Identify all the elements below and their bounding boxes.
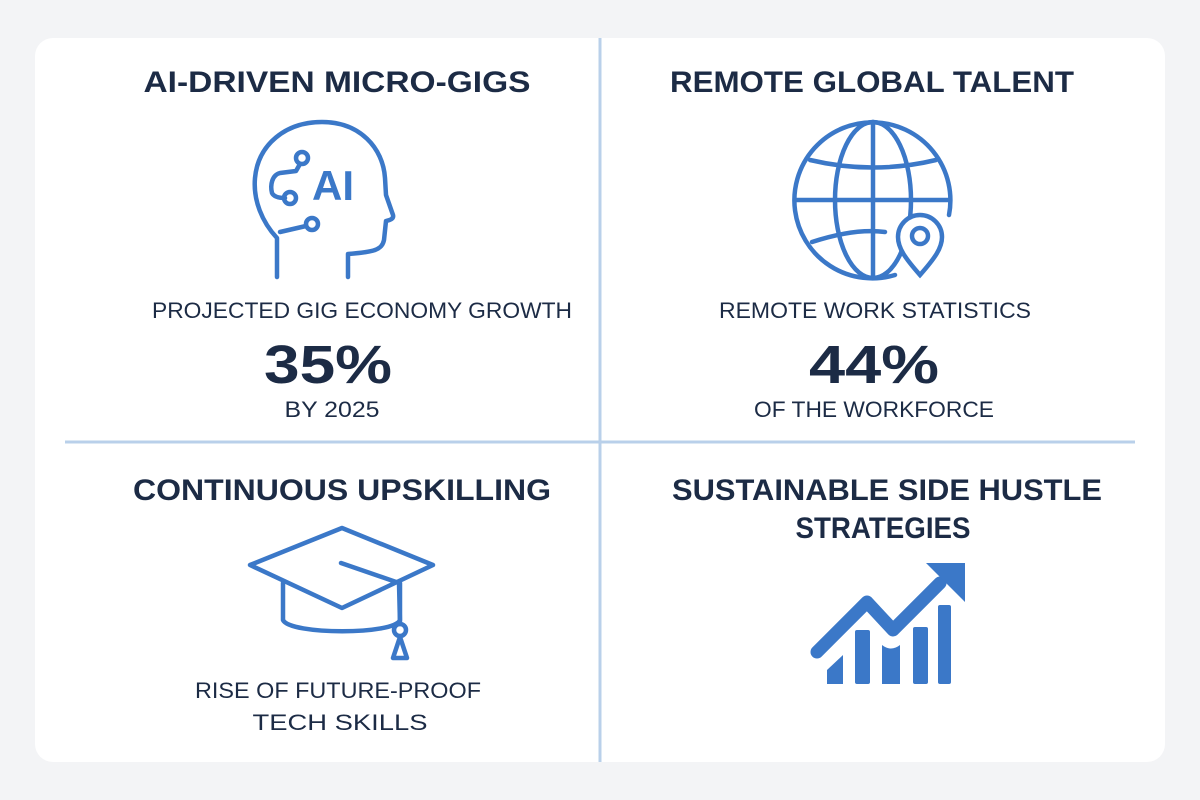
icon: globe with pin (794, 122, 950, 278)
icon: graduation cap (250, 528, 433, 658)
text: projected growth stat: BY 2025 (284, 397, 380, 422)
panel: sustainable side hustle (672, 474, 1102, 684)
text: remote work stat: 44% (809, 335, 939, 395)
text: projected growth stat: 35% (264, 335, 392, 395)
panel: AI-driven micro-gigs (144, 66, 572, 422)
heading: sustainable side hustle strategies (672, 474, 1102, 545)
text: future-proof skills (195, 678, 481, 735)
text: remote work stat (719, 298, 1031, 422)
panel: remote global talent (670, 66, 1074, 422)
text: future-proof skills: RISE OF FUTURE-PROOF (195, 678, 481, 703)
icon: AI head (255, 122, 393, 277)
text: remote work stat: OF THE WORKFORCE (754, 397, 994, 422)
heading: continuous upskilling: CONTINUOUS UPSKILLING (133, 474, 551, 507)
text: projected growth stat (152, 298, 572, 422)
panel: continuous upskilling (133, 474, 551, 735)
heading: sustainable side hustle strategies: STRATEGIES (796, 512, 970, 545)
text: projected growth stat: PROJECTED GIG ECONOMY GROWTH (152, 298, 572, 323)
heading: sustainable side hustle strategies: SUSTAINABLE SIDE HUSTLE (672, 474, 1102, 507)
panel: AI-driven micro-gigs: AI (312, 162, 354, 209)
icon: growth chart (817, 563, 965, 684)
heading: remote global talent: REMOTE GLOBAL TALENT (670, 66, 1074, 99)
text: future-proof skills: TECH SKILLS (252, 710, 428, 735)
text: remote work stat: REMOTE WORK STATISTICS (719, 298, 1031, 323)
heading: AI-driven micro-gigs: AI-DRIVEN MICRO-GIGS (144, 66, 530, 99)
